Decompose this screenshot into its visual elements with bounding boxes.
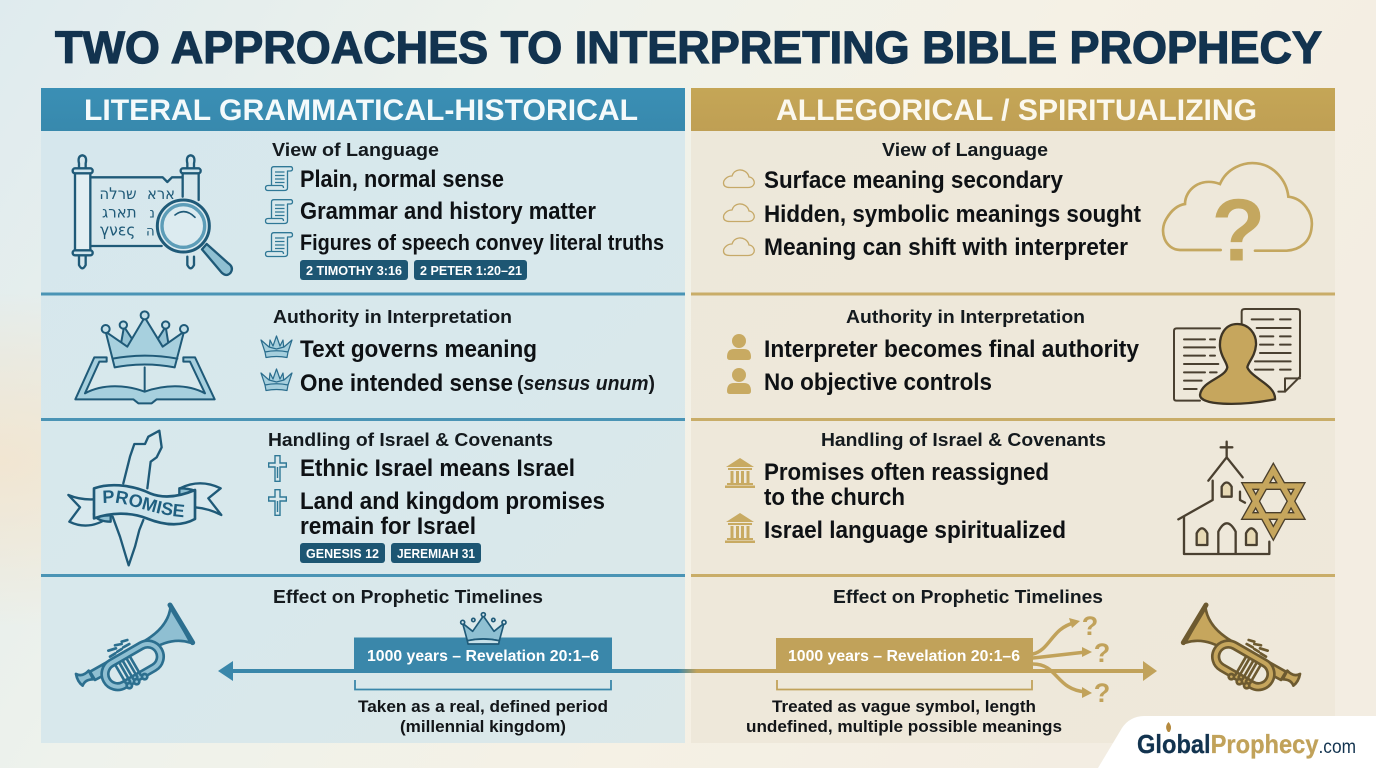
bullet list: Israel left: remain for Israel [300, 513, 476, 540]
panel background left [41, 131, 685, 743]
bullet list: view of language right: Surface meaning secondary [764, 167, 1064, 194]
icon: Israel map with promise banner: PROMISE [103, 490, 184, 518]
bracket: vague period [777, 680, 1032, 690]
bullet list: Israel left [269, 455, 605, 540]
icon: scroll with magnifier: נ [149, 205, 155, 221]
bullet list: view of language left [266, 166, 664, 256]
icon: scroll with magnifier [73, 155, 232, 275]
bullet list: Israel left: Ethnic Israel means Israel [300, 455, 575, 482]
timeline bar: literal 1000 years: 1000 years – Revelation 20:1–6 [367, 648, 599, 665]
logo: GlobalProphecy.com: GlobalProphecy.com [1137, 729, 1356, 759]
header right [691, 88, 1335, 131]
icon: crown on open book [75, 311, 215, 403]
timeline bar: literal 1000 years [354, 638, 612, 672]
logo: GlobalProphecy.com [1098, 716, 1376, 768]
bullet list: Israel right: Promises often reassigned [764, 459, 1049, 486]
bullet list: authority right: No objective controls [764, 369, 992, 396]
icon: scroll with magnifier: שרלה [99, 184, 137, 203]
subheading: view of language left: View of Language [272, 139, 439, 160]
bullet list: authority right [727, 334, 1140, 396]
icon: cloud with question mark [1163, 163, 1312, 280]
scripture tags: Genesis and Jeremiah: GENESIS 12 [306, 546, 379, 561]
bullet list: authority right: Interpreter becomes final authority [764, 336, 1140, 363]
bullet list: authority left: Text governs meaning [300, 336, 537, 363]
fanning arrows with question marks: ? [1094, 638, 1110, 668]
scripture tags: 2 Timothy and 2 Peter: 2 PETER 1:20–21 [420, 263, 522, 278]
scripture tags: Genesis and Jeremiah: JEREMIAH 31 [397, 546, 475, 561]
fanning arrows with question marks: ? [1082, 611, 1098, 641]
bullet list: view of language right [724, 167, 1141, 261]
title: TWO APPROACHES TO INTERPRETING BIBLE PROPHECY [55, 22, 1322, 73]
caption: allegorical timeline: undefined, multiple possible meanings [746, 717, 1062, 736]
timeline bar: allegorical 1000 years [776, 638, 1033, 672]
scripture tags: 2 Timothy and 2 Peter: 2 TIMOTHY 3:16 [306, 263, 402, 278]
subheading: Israel left: Handling of Israel & Covenants [268, 429, 553, 450]
subheading: timelines left: Effect on Prophetic Timelines [273, 586, 543, 607]
caption: allegorical timeline: Treated as vague symbol, length [772, 697, 1036, 716]
timeline arrow spanning both panels [218, 661, 1157, 681]
panel: allegorical / spiritualizing [691, 88, 1335, 743]
scripture tags: Genesis and Jeremiah [300, 543, 481, 563]
header left: LITERAL GRAMMATICAL-HISTORICAL [84, 94, 638, 127]
icon: interpreter with documents [1174, 309, 1300, 404]
icon: trumpet left [76, 605, 193, 696]
icon: crown on timeline [461, 613, 506, 644]
icon: scroll with magnifier: תארג [102, 203, 137, 221]
subheading: authority left: Authority in Interpretation [273, 306, 512, 327]
bullet list: authority left: (sensus unum) [517, 373, 655, 395]
fanning arrows with question marks [1033, 611, 1110, 708]
icon: trumpet right [1183, 605, 1300, 696]
bullet list: authority left: One intended sense [300, 370, 513, 397]
subheading: Israel right: Handling of Israel & Covenants [821, 429, 1106, 450]
bracket: literal period [355, 680, 611, 690]
caption: allegorical timeline [746, 697, 1062, 736]
panel: literal grammatical-historical [41, 88, 685, 743]
bullet list: view of language left: Plain, normal sense [300, 166, 504, 193]
bullet list: Israel left: Land and kingdom promises [300, 488, 605, 515]
header right: ALLEGORICAL / SPIRITUALIZING [776, 94, 1257, 127]
bullet list: view of language right: Hidden, symbolic meanings sought [764, 201, 1141, 228]
bullet list: Israel right: to the church [764, 484, 905, 511]
caption: literal timeline: (millennial kingdom) [400, 717, 566, 736]
caption: literal timeline: Taken as a real, defined period [358, 697, 608, 716]
icon: church with star of David [1178, 442, 1299, 554]
subheading: view of language right: View of Language [882, 139, 1048, 160]
bullet list: view of language right: Meaning can shift with interpreter [764, 234, 1128, 261]
scripture tags: 2 Timothy and 2 Peter [300, 260, 527, 280]
icon: cloud with question mark: ? [1211, 181, 1265, 280]
bullet list: authority left [261, 336, 655, 397]
caption: literal timeline [358, 697, 608, 736]
icon: scroll with magnifier: ארא [147, 184, 175, 203]
icon: Israel map with promise banner [67, 430, 222, 566]
panel background right [691, 131, 1335, 743]
subheading: timelines right: Effect on Prophetic Timelines [833, 586, 1103, 607]
timeline bar: allegorical 1000 years: 1000 years – Revelation 20:1–6 [788, 648, 1020, 665]
bullet list: view of language left: Grammar and history matter [300, 198, 596, 225]
bullet list: Israel right: Israel language spiritualized [764, 517, 1066, 544]
subheading: authority right: Authority in Interpretation [846, 306, 1085, 327]
bullet list: view of language left: Figures of speech convey literal truths [300, 230, 664, 255]
bullet list: Israel right [725, 458, 1066, 544]
fanning arrows with question marks: ? [1094, 678, 1110, 708]
icon: scroll with magnifier: γνες [100, 220, 135, 239]
icon: scroll with magnifier: ה [146, 224, 155, 239]
header left [41, 88, 685, 131]
